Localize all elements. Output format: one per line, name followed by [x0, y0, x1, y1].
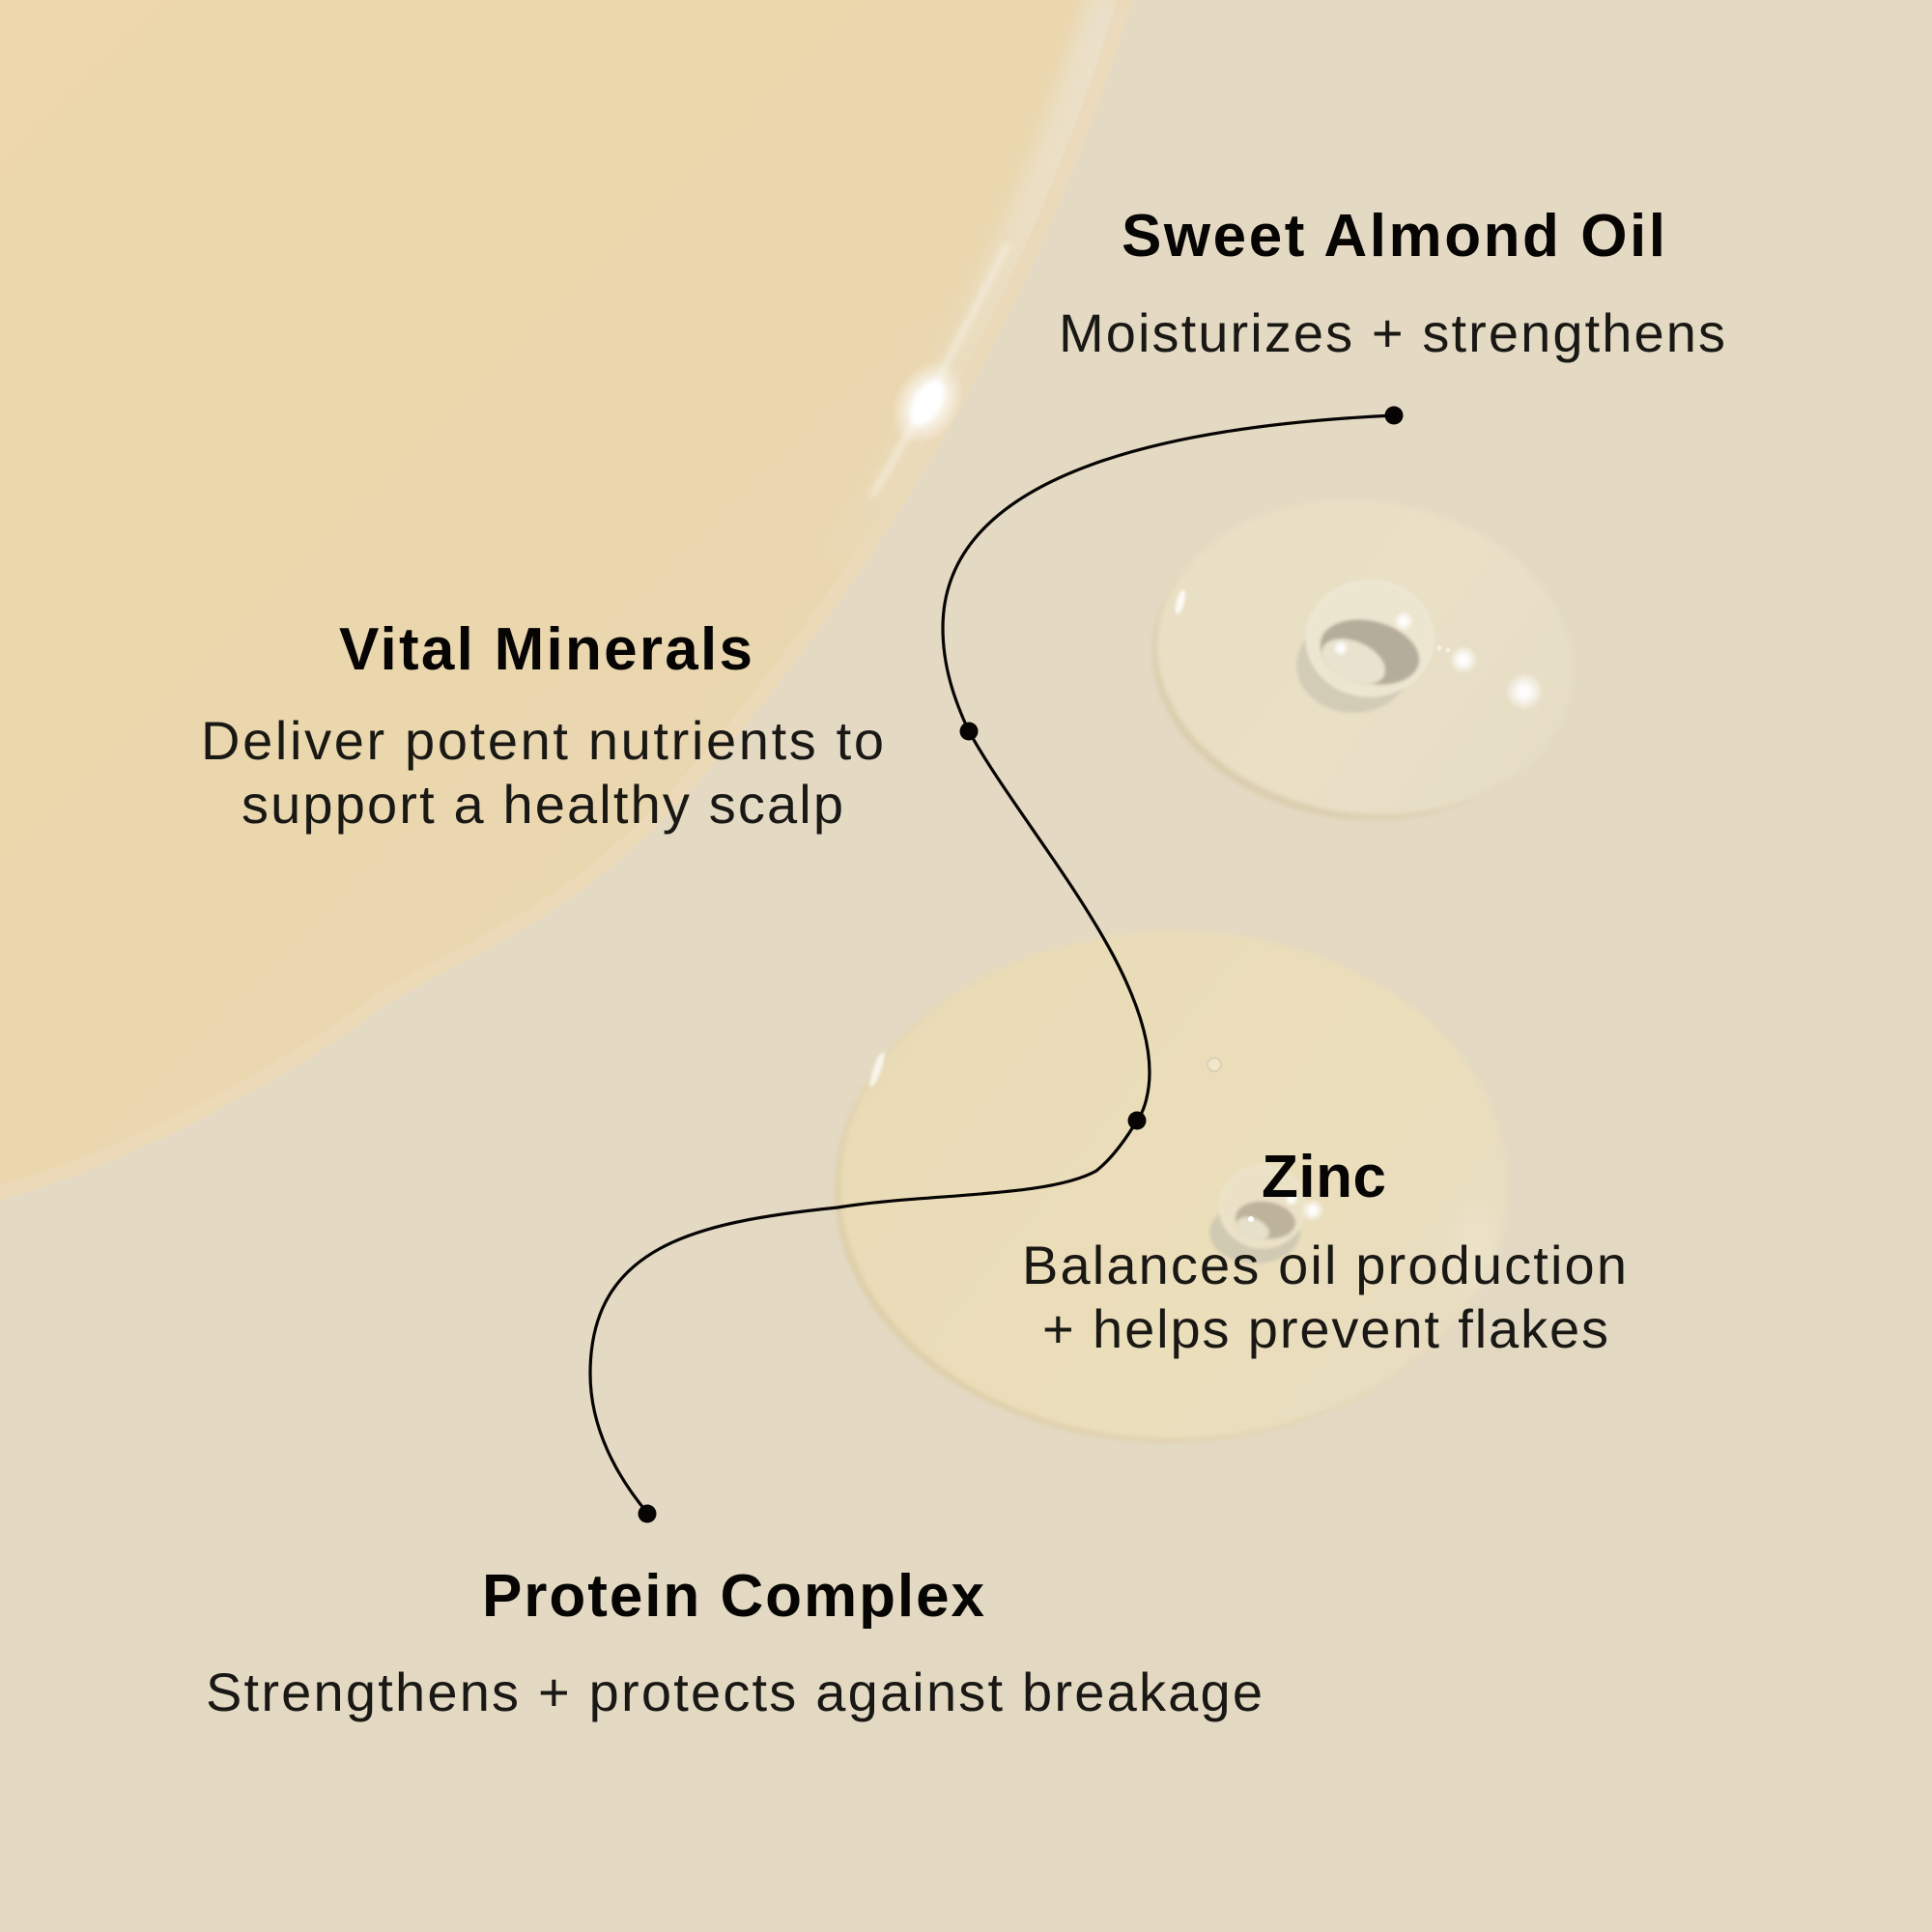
heading: Protein Complex — [482, 1563, 985, 1630]
bubble shadow — [1209, 1202, 1300, 1264]
bubble dome — [1220, 1166, 1305, 1247]
description: Moisturizes + strengthens — [1059, 302, 1725, 363]
dot: zinc — [1128, 1111, 1146, 1130]
pool rim streak highlight — [872, 244, 1008, 496]
tiny bubble — [1208, 1058, 1221, 1071]
connector curve — [590, 415, 1394, 1513]
bubble reflections — [1332, 611, 1544, 711]
connector line with dots — [590, 406, 1403, 1522]
label: protein complex — [206, 1563, 1263, 1722]
right soft glow — [1448, 1201, 1498, 1292]
pool rim bands — [0, 0, 1132, 1200]
bubble reflections — [1248, 1191, 1324, 1222]
heading: Sweet Almond Oil — [1122, 203, 1665, 270]
description line 2: support a healthy scalp — [242, 774, 843, 835]
large oil pool — [0, 0, 1132, 1200]
heading: Zinc — [1262, 1144, 1386, 1210]
oil droplet: lower centre — [836, 931, 1508, 1441]
left edge sheen — [867, 1051, 887, 1088]
dot: sweet almond oil — [1385, 406, 1403, 425]
bubble shadow — [1296, 618, 1410, 713]
description: Strengthens + protects against breakage — [206, 1662, 1263, 1722]
dot: protein complex — [638, 1505, 657, 1522]
description line 2: + helps prevent flakes — [1042, 1298, 1608, 1359]
pool sparkle — [877, 348, 978, 458]
dot: vital minerals — [960, 723, 978, 740]
pool body — [0, 0, 1132, 1200]
droplet body — [1133, 482, 1581, 845]
bubble dark centre — [1234, 1198, 1297, 1242]
bubble light oval — [1314, 630, 1393, 694]
bubble dome — [1307, 582, 1433, 696]
label: zinc — [1022, 1144, 1627, 1359]
bubble dark centre — [1314, 610, 1426, 695]
left edge sheen — [1174, 588, 1187, 615]
description line 1: Deliver potent nutrients to — [201, 710, 884, 771]
label: sweet almond oil — [1059, 203, 1725, 363]
label: vital minerals — [201, 616, 884, 835]
heading: Vital Minerals — [339, 616, 753, 683]
droplet body — [836, 939, 1500, 1441]
description line 1: Balances oil production — [1022, 1235, 1627, 1295]
oil droplet: upper right — [1133, 473, 1594, 845]
bubble light oval — [1233, 1212, 1273, 1245]
